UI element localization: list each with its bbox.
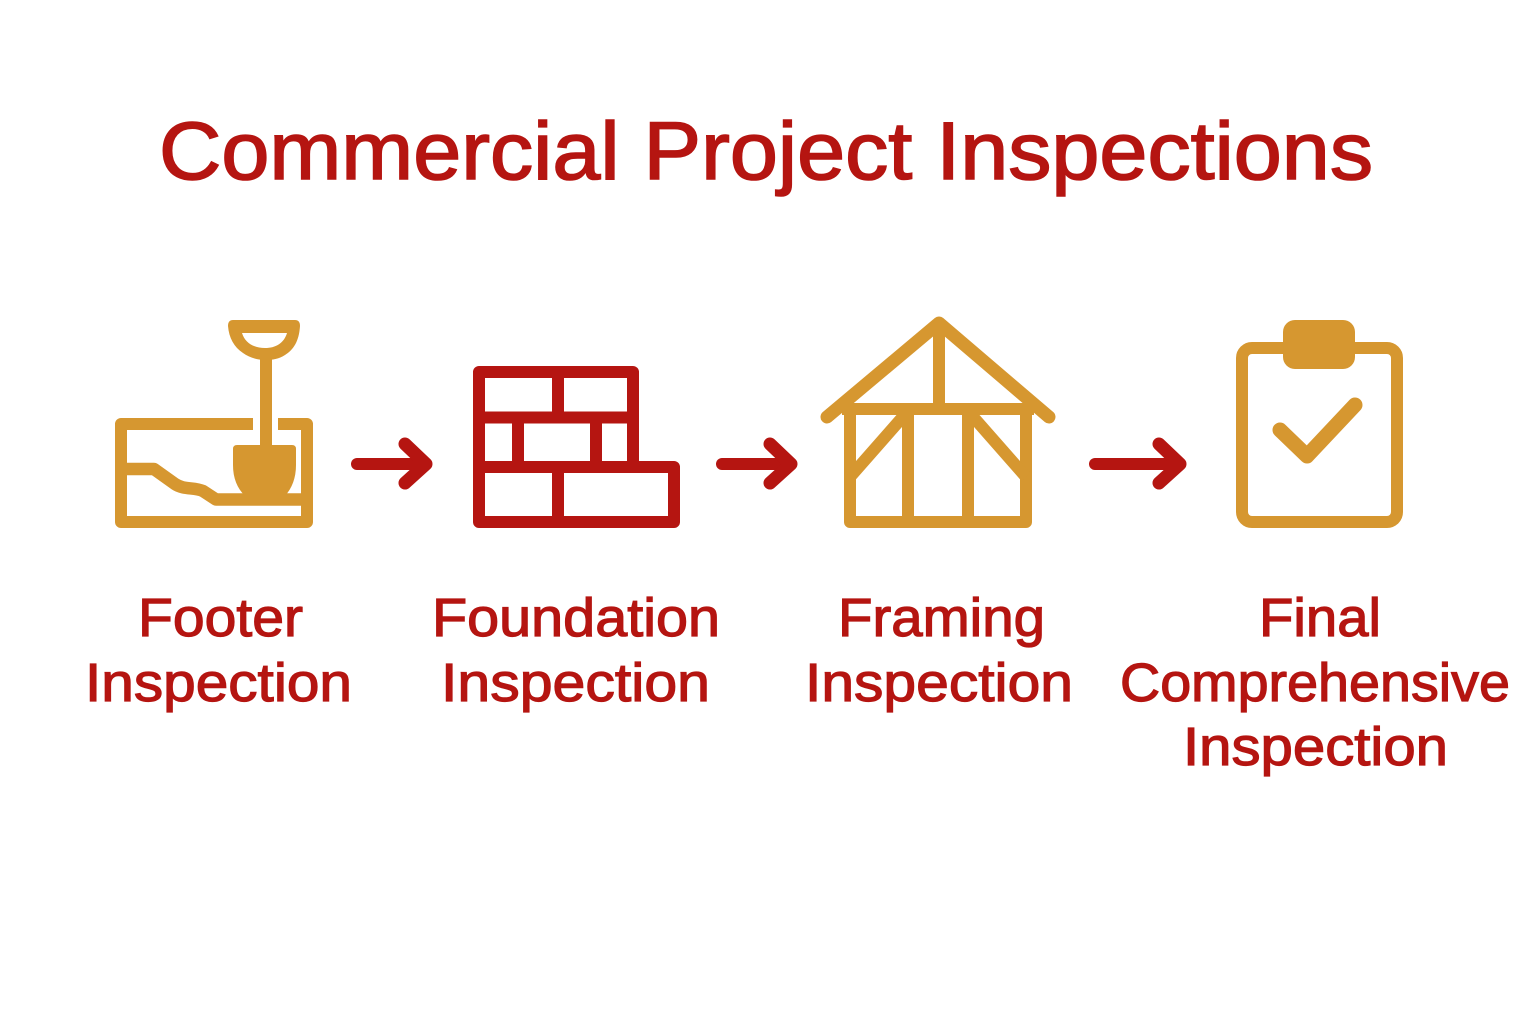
icon: brick wall [479,372,674,522]
label: final comprehensive inspection: Comprehensive [1120,653,1510,713]
label: framing inspection: Framing [838,588,1045,648]
icon: timber house frame [827,323,1049,522]
label: final comprehensive inspection: Final [1259,588,1381,648]
arrow: framing to final [1095,444,1180,483]
label: foundation inspection: Inspection [441,653,710,713]
icon: shovel in footer trench [121,320,307,522]
label: footer inspection: Footer [138,588,303,648]
label: final comprehensive inspection: Inspection [1183,717,1448,777]
label: final comprehensive inspection [1120,588,1510,777]
arrow: footer to foundation [357,444,426,483]
label: framing inspection [805,588,1073,713]
label: foundation inspection: Foundation [432,588,720,648]
label: foundation inspection [432,588,720,713]
title: Commercial Project Inspections [159,106,1373,197]
label: framing inspection: Inspection [805,653,1073,713]
label: footer inspection: Inspection [85,653,352,713]
arrow: foundation to framing [722,444,791,483]
icon: clipboard with check mark [1242,320,1397,522]
label: footer inspection [85,588,352,713]
